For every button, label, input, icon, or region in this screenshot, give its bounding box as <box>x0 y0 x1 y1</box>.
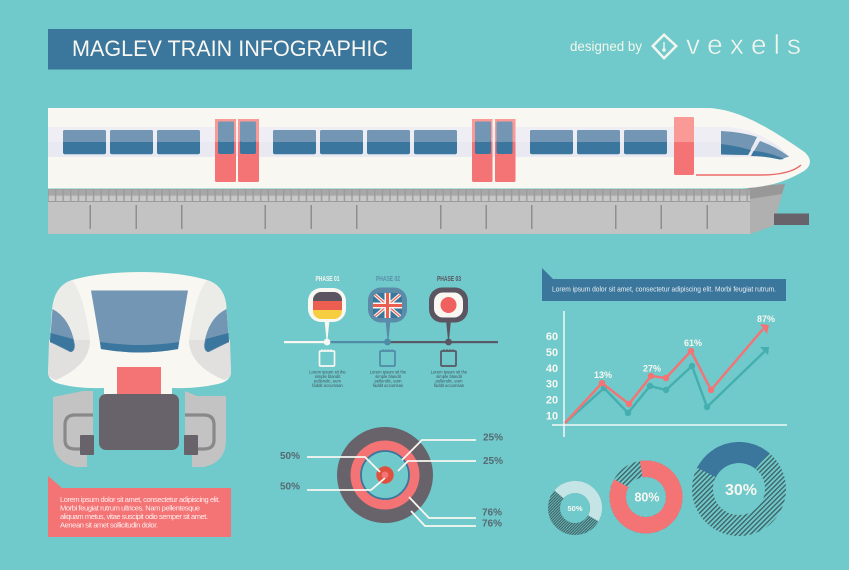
right shade lower <box>189 340 231 380</box>
value labels: 61% <box>684 338 702 348</box>
target labels: 50% <box>280 482 300 492</box>
donut chart 50%: 50% <box>567 504 583 513</box>
callout: red text box: Aenean sit amet sollicitudin dolor. <box>60 520 158 530</box>
donut chart 80% <box>610 460 683 533</box>
callout: blue chart caption: Lorem ipsum dolor sit amet, consectetur adipiscing elit. Morbi feugiat rutrum. <box>552 286 776 294</box>
outer ring <box>337 427 433 523</box>
callout: blue chart caption <box>542 268 786 301</box>
timeline <box>284 276 498 388</box>
y axis labels: 40 <box>546 363 558 375</box>
front door <box>674 117 694 175</box>
y axis labels: 60 <box>546 331 558 343</box>
suspension arm left <box>65 415 93 449</box>
front windshield <box>91 290 188 352</box>
donut chart 50% <box>554 481 602 529</box>
phase captions: simple blandit <box>375 374 402 379</box>
donut chart 30% <box>697 442 776 526</box>
front body <box>48 272 231 388</box>
phase labels: PHASE 02 <box>376 276 400 283</box>
title <box>48 29 412 70</box>
train body <box>48 108 810 188</box>
teal series <box>565 347 769 423</box>
guideway rail <box>48 189 750 202</box>
value labels <box>594 314 775 380</box>
train front view <box>48 272 231 467</box>
phase labels <box>316 276 461 283</box>
title: MAGLEV TRAIN INFOGRAPHIC <box>72 36 388 61</box>
callout: red text box <box>48 476 231 537</box>
neck <box>104 382 172 396</box>
windshield <box>721 131 789 160</box>
phase captions: faddit accumsan <box>373 383 404 388</box>
phase captions: Lorem ipsum sit the <box>370 370 407 374</box>
red trim line <box>696 165 801 175</box>
beam ticks <box>90 205 708 229</box>
phase captions <box>309 370 468 388</box>
phase captions: simple blandit <box>315 374 341 379</box>
train side view <box>48 108 810 234</box>
phase labels: PHASE 01 <box>316 276 340 283</box>
donut chart 30%: 30% <box>725 482 757 499</box>
line chart <box>546 311 787 437</box>
target labels <box>280 432 503 530</box>
pin: United Kingdom <box>368 288 407 345</box>
pin: Germany <box>308 288 346 345</box>
support left <box>53 391 93 467</box>
phase captions: Lorem ipsum sit the <box>309 370 346 374</box>
phase labels: PHASE 03 <box>437 276 461 283</box>
left shade upper <box>50 280 90 340</box>
phase captions: simple blandit <box>436 374 463 379</box>
side window right <box>204 309 229 352</box>
door set 2 <box>472 119 516 182</box>
leader lines <box>307 440 476 526</box>
windshield lower strip <box>100 342 179 352</box>
magnet right <box>184 435 198 455</box>
phase captions: pellendic, eum <box>314 378 342 384</box>
magnet left <box>80 435 94 455</box>
callout: red text box: aliquam metus, vitae suscipit odio semper sit amet. <box>60 512 208 521</box>
red panel <box>117 367 161 395</box>
window band lower <box>48 142 790 157</box>
pink series <box>565 324 769 423</box>
value labels: 27% <box>643 364 661 374</box>
underside shadow <box>748 184 785 199</box>
donut chart 80%: 80% <box>634 490 660 504</box>
pin: Japan <box>429 288 468 345</box>
y axis labels <box>546 331 558 422</box>
phase captions: faddit accumsan <box>312 383 343 388</box>
suspension arm right <box>185 415 214 449</box>
phase captions: pellendic, eum <box>435 378 463 384</box>
phase captions: Lorem ipsum sit the <box>431 370 468 374</box>
value labels: 87% <box>757 314 775 324</box>
target labels: 25% <box>483 432 503 444</box>
value labels: 13% <box>594 370 612 380</box>
y axis labels: 30 <box>546 378 558 390</box>
target labels: 50% <box>280 451 300 462</box>
callout: red text box: Lorem ipsum dolor sit amet, consectetur adipiscing elit. <box>60 495 220 504</box>
train nose underside <box>748 184 785 234</box>
pink ring <box>350 440 420 510</box>
support right <box>185 391 226 467</box>
side window left <box>50 309 75 352</box>
target labels: 76% <box>482 508 502 518</box>
door set 1 <box>215 119 259 182</box>
axes <box>552 311 787 437</box>
right shade upper <box>189 280 229 340</box>
y axis labels: 20 <box>546 394 558 406</box>
window band <box>48 127 772 142</box>
side window left lower <box>50 333 74 352</box>
calendar icon 3 <box>441 349 456 366</box>
blue ring <box>361 451 409 499</box>
line segments <box>284 341 328 343</box>
center <box>376 466 394 484</box>
y axis labels: 50 <box>546 347 558 359</box>
y axis labels: 10 <box>546 410 558 422</box>
calendar icon 1 <box>320 349 334 366</box>
side window right lower <box>205 333 229 352</box>
center dot <box>382 472 388 478</box>
guideway beam <box>48 201 750 234</box>
guideway tab <box>774 214 809 225</box>
phase captions: pellendic, eum <box>374 378 402 384</box>
callout: red text box: Morbi feugiat rutrum ultrices. Nam pellentesque <box>60 504 200 512</box>
target labels: 76% <box>482 518 502 530</box>
logo: designed by vexels <box>570 29 801 60</box>
left shade lower <box>48 340 90 380</box>
phase captions: faddit accumsan <box>434 383 465 388</box>
windows <box>63 130 667 154</box>
bogie <box>99 394 179 450</box>
calendar icon 2 <box>380 349 395 366</box>
logo: designed by vexels: vexels <box>686 29 801 60</box>
target chart <box>280 427 503 530</box>
logo: designed by vexels: designed by <box>570 38 642 54</box>
target labels: 25% <box>483 456 503 467</box>
